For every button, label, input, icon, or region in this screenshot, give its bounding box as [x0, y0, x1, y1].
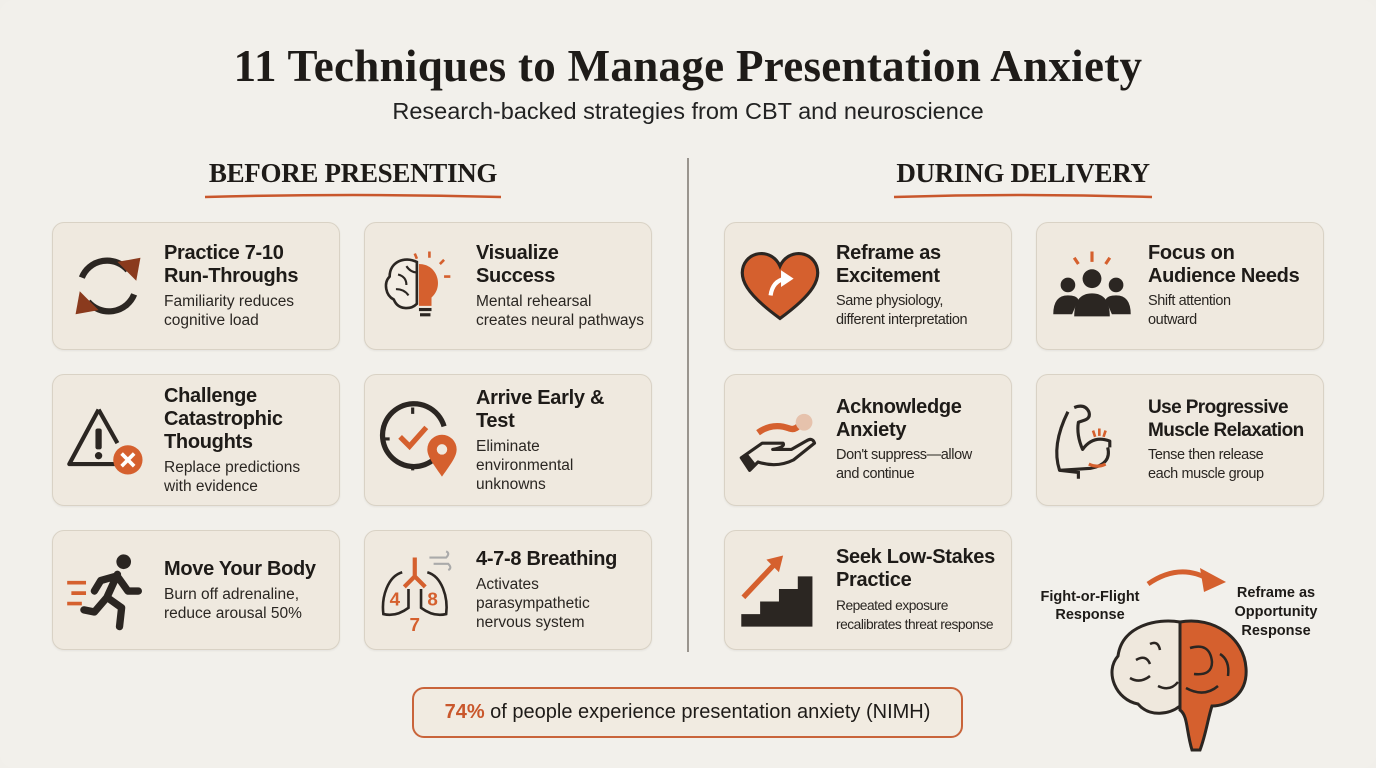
icon: hand with flame: [740, 414, 816, 472]
card: arrive early: unknowns: [476, 476, 546, 492]
heading: before presenting: BEFORE PRESENTING: [209, 158, 497, 188]
card: arrive early: [364, 374, 652, 506]
card: breathing: Activates: [476, 576, 539, 593]
card: practice: Run-Throughs: [164, 265, 298, 287]
card: move body: Move Your Body: [164, 558, 316, 580]
card: muscle: Muscle Relaxation: [1148, 420, 1304, 441]
card: practice: cognitive load: [164, 312, 259, 329]
label: fight or flight: Fight-or-Flight: [1040, 589, 1140, 605]
brain diagram: [1040, 568, 1318, 752]
card: audience: Shift attention: [1148, 293, 1231, 309]
card: breathing: parasympathetic: [476, 595, 590, 612]
card: visualize: Mental rehearsal: [476, 293, 591, 310]
title: 11 Techniques to Manage Presentation Anxiety: [234, 41, 1142, 91]
card: visualize: creates neural pathways: [476, 312, 644, 329]
card: breathing: 4-7-8 Breathing: [476, 548, 617, 570]
label: reframe opportunity: [1235, 585, 1318, 639]
card: challenge: Catastrophic: [164, 408, 283, 430]
card: low stakes: Seek Low-Stakes: [836, 546, 995, 568]
card: muscle: Tense then release: [1148, 447, 1263, 463]
subtitle: Research-backed strategies from CBT and neuroscience: [392, 98, 984, 124]
card: reframe: [724, 222, 1012, 350]
card: visualize: Success: [476, 265, 555, 287]
icon: lungs 4-7-8: 4: [390, 589, 401, 610]
card: move body: reduce arousal 50%: [164, 604, 302, 622]
card: audience: outward: [1148, 312, 1197, 328]
card: arrive early: environmental: [476, 456, 573, 474]
card: move body: [52, 530, 340, 650]
icon: stairs arrow: [741, 556, 812, 627]
card: visualize: [364, 222, 652, 350]
card: breathing: [364, 530, 652, 650]
arrow: [1110, 568, 1248, 752]
card: low stakes: Practice: [836, 569, 911, 591]
label: reframe opportunity: Reframe as: [1237, 585, 1315, 601]
card: arrive early: Eliminate: [476, 438, 540, 454]
card: challenge: [52, 374, 340, 506]
label: reframe opportunity: Response: [1241, 623, 1311, 639]
card: acknowledge: Acknowledge: [836, 396, 962, 418]
icon: lungs 4-7-8: 8: [427, 589, 438, 610]
card: challenge: with evidence: [164, 478, 258, 494]
card: muscle: Use Progressive: [1148, 397, 1288, 418]
card: challenge: Replace predictions: [164, 458, 300, 476]
card: low stakes: [724, 530, 1012, 650]
card: practice: [52, 222, 340, 350]
card: reframe: Same physiology,: [836, 293, 943, 309]
card: breathing: nervous system: [476, 614, 585, 631]
card: challenge: Thoughts: [164, 430, 253, 452]
card: low stakes: recalibrates threat response: [836, 617, 993, 632]
card: arrive early: Test: [476, 410, 514, 432]
card: reframe: Excitement: [836, 265, 940, 287]
card: audience: [1036, 222, 1324, 350]
card: audience: Focus on: [1148, 242, 1234, 264]
heading: during delivery: DURING DELIVERY: [896, 158, 1150, 188]
card: low stakes: Repeated exposure: [836, 598, 948, 613]
icon: runner: [67, 554, 142, 630]
icon: warning: [67, 408, 142, 474]
label: reframe opportunity: Opportunity: [1235, 604, 1317, 620]
card: reframe: different interpretation: [836, 312, 967, 328]
card: practice: Familiarity reduces: [164, 293, 294, 310]
card: acknowledge: Don't suppress—allow: [836, 447, 972, 463]
card: audience: Audience Needs: [1148, 265, 1299, 287]
icon: lungs 4-7-8: [382, 550, 452, 635]
card: move body: Burn off adrenaline,: [164, 586, 299, 602]
icon: people: [1053, 252, 1131, 316]
card: practice: Practice 7-10: [164, 242, 284, 264]
card: acknowledge: Anxiety: [836, 419, 906, 441]
label: fight or flight: [1040, 589, 1140, 623]
icon: lungs 4-7-8: 7: [410, 614, 420, 635]
icon: heart: [740, 252, 820, 320]
card: acknowledge: [724, 374, 1012, 506]
icon: cycle arrows: [76, 258, 140, 314]
callout: statistic: 74% of people experience presentation anxiety (NIMH): [445, 701, 930, 723]
card: reframe: Reframe as: [836, 242, 941, 264]
icon: clock with pin: [380, 401, 457, 476]
icon: flexed arm: [1055, 404, 1112, 479]
callout: statistic: [412, 687, 963, 738]
label: fight or flight: Response: [1055, 607, 1125, 623]
icon: brain: [1112, 621, 1180, 713]
card: arrive early: Arrive Early &: [476, 386, 604, 408]
card: challenge: Challenge: [164, 384, 257, 406]
icon: brain bulb: [384, 252, 450, 316]
card: muscle: [1036, 374, 1324, 506]
card: visualize: Visualize: [476, 242, 559, 264]
card: muscle: each muscle group: [1148, 466, 1264, 482]
card: acknowledge: and continue: [836, 466, 914, 482]
